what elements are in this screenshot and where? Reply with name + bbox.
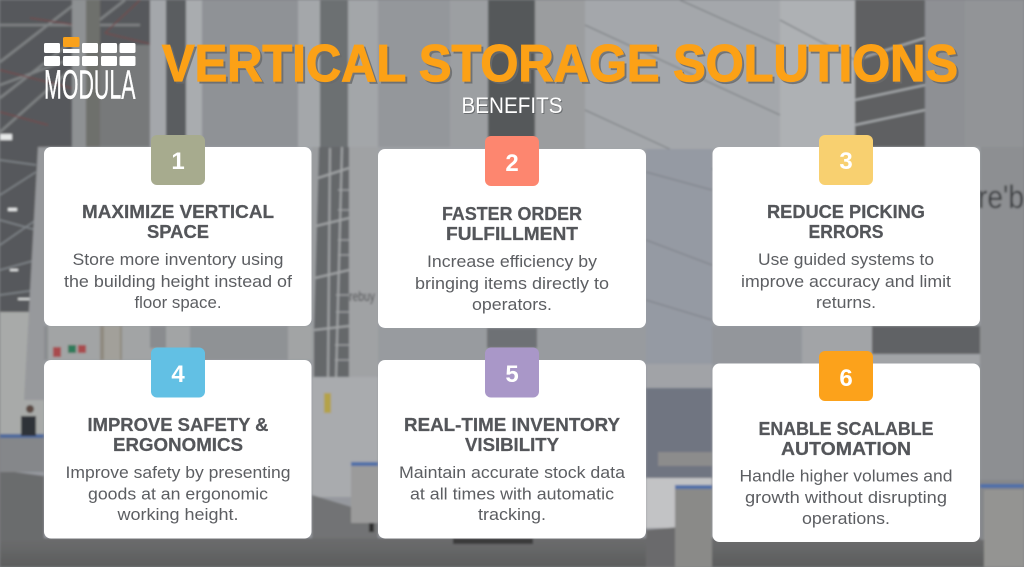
subtitle: BENEFITS	[462, 94, 564, 119]
body text: goods at an ergonomic	[88, 484, 269, 504]
body text: Store more inventory using	[72, 250, 284, 269]
logo: Modula	[44, 37, 136, 108]
body text: Use guided systems to	[758, 250, 934, 269]
body text: operations.	[802, 509, 890, 528]
panel: maximize vertical space	[44, 135, 312, 326]
subtitle: BENEFITS	[462, 93, 562, 118]
panel: improve safety and ergonomics	[44, 348, 312, 538]
heading: VISIBILITY	[465, 434, 560, 455]
side wall, right	[980, 147, 1024, 487]
heading: IMPROVE SAFETY &	[88, 414, 268, 435]
badge 4: 4	[171, 361, 185, 388]
heading: ERRORS	[808, 221, 884, 242]
heading: FULFILLMENT	[446, 223, 579, 244]
badge 5	[485, 348, 539, 398]
columns and wall panels, upper	[72, 0, 86, 147]
slanted left column	[24, 147, 46, 400]
body text: the building height instead of	[64, 272, 292, 291]
badge 6: 6	[839, 365, 853, 392]
heading	[767, 201, 925, 242]
body text: Maintain accurate stock data	[399, 463, 626, 482]
heading: AUTOMATION	[781, 438, 911, 459]
body text: bringing items directly to	[415, 274, 609, 293]
badge 3: 3	[839, 148, 853, 175]
heading: SPACE	[147, 221, 209, 242]
badge 4	[151, 348, 205, 398]
body text: at all times with automatic	[410, 484, 615, 504]
heading	[82, 201, 274, 242]
body text: floor space.	[134, 293, 222, 312]
body text: Increase efficiency by	[427, 252, 598, 271]
badge 3	[819, 135, 873, 185]
badge 6	[819, 351, 873, 401]
carts	[351, 452, 1024, 567]
panel: reduce picking errors	[712, 135, 980, 326]
heading	[758, 418, 934, 459]
heading: REDUCE PICKING	[767, 201, 925, 222]
badge 1	[151, 135, 205, 185]
heading	[88, 414, 268, 455]
heading: FASTER ORDER	[442, 203, 582, 224]
body text: returns.	[816, 293, 876, 312]
badge 1: 1	[171, 148, 185, 175]
panel: enable scalable automation	[712, 351, 980, 542]
body text: tracking.	[478, 505, 546, 524]
middle wall band below top cards	[44, 326, 312, 360]
panel: real-time inventory visibility	[378, 348, 646, 538]
title: VERTICAL STORAGE SOLUTIONS	[164, 37, 960, 95]
body text: working height.	[116, 505, 238, 524]
body text: Handle higher volumes and	[740, 466, 952, 486]
floor	[0, 470, 44, 567]
logo wordmark: MODULA	[44, 62, 136, 108]
heading: MAXIMIZE VERTICAL	[82, 201, 274, 222]
heading: ERGONOMICS	[113, 434, 243, 455]
body text	[66, 463, 290, 524]
left back wall	[0, 312, 44, 472]
heading	[404, 414, 621, 455]
column and window between cards	[312, 147, 378, 387]
panel: faster order fulfillment	[378, 136, 646, 328]
body text	[415, 252, 609, 314]
body text: growth without disrupting	[745, 488, 947, 507]
heading: REAL-TIME INVENTORY	[404, 414, 621, 435]
heading: ENABLE SCALABLE	[758, 418, 934, 439]
ceiling and roof trusses	[0, 0, 200, 312]
title: VERTICAL STORAGE SOLUTIONS	[162, 35, 958, 93]
body text	[64, 250, 292, 312]
body text: improve accuracy and limit	[741, 272, 951, 291]
heading	[442, 203, 582, 244]
badge 2: 2	[505, 150, 519, 177]
left cart and person	[0, 405, 44, 472]
body text	[399, 463, 626, 524]
rebuy logo on column: rebuy	[349, 288, 375, 304]
body text: Improve safety by presenting	[66, 463, 290, 482]
badge 2	[485, 136, 539, 186]
body text	[740, 466, 952, 528]
badge 5: 5	[505, 361, 519, 388]
body text: operators.	[472, 295, 552, 314]
logo blocks	[44, 37, 136, 66]
body text	[741, 250, 951, 312]
